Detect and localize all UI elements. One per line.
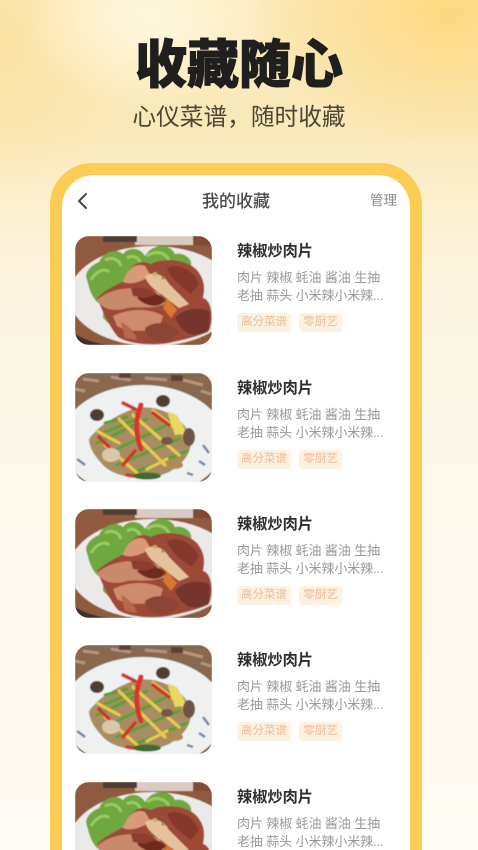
recipe row 4 xyxy=(75,645,384,754)
ingredients line 1: 肉片 辣椒 蚝油 酱油 生抽 xyxy=(237,816,380,830)
photo: meat with lettuce xyxy=(75,509,212,618)
tag: high score: 高分菜谱 xyxy=(241,725,287,737)
recipe row 1 xyxy=(75,236,384,345)
tag: beginner: 零厨艺 xyxy=(303,725,338,737)
ingredients line 1: 肉片 辣椒 蚝油 酱油 生抽 xyxy=(237,270,380,284)
ingredients line 2: 老抽 蒜头 小米辣小米辣... xyxy=(237,696,384,712)
tag: high score xyxy=(237,586,291,605)
recipe name: 辣椒炒肉片 xyxy=(237,516,313,532)
photo: stir-fried strips xyxy=(75,373,212,482)
photo: stir-fried strips xyxy=(75,645,212,754)
recipe name: 辣椒炒肉片 xyxy=(237,652,313,668)
recipe name: 辣椒炒肉片 xyxy=(237,788,313,806)
icon: back arrow xyxy=(78,193,87,209)
recipe row 5 (cut off) xyxy=(75,782,384,850)
recipe name: 辣椒炒肉片 xyxy=(237,380,313,396)
tag: high score xyxy=(237,450,291,469)
tag: high score: 高分菜谱 xyxy=(241,316,287,328)
title: 收藏随心 xyxy=(135,37,343,95)
ingredients line 1: 肉片 辣椒 蚝油 酱油 生抽 xyxy=(237,542,380,558)
tag: beginner xyxy=(299,722,342,741)
ingredients line 1: 肉片 辣椒 蚝油 酱油 生抽 xyxy=(237,406,380,422)
recipe row 2 xyxy=(75,373,384,482)
photo: meat with lettuce xyxy=(75,236,212,345)
tag: high score xyxy=(237,722,291,741)
tag: beginner: 零厨艺 xyxy=(303,453,338,465)
ingredients line 2: 老抽 蒜头 小米辣小米辣... xyxy=(237,834,384,848)
recipe name: 辣椒炒肉片 xyxy=(237,242,313,260)
tag: high score xyxy=(237,313,291,332)
tag: beginner: 零厨艺 xyxy=(303,589,338,601)
phone screen: white panel xyxy=(62,175,410,850)
nav heading: 我的收藏 xyxy=(202,192,270,211)
subtitle: 心仪菜谱，随时收藏 xyxy=(132,105,346,131)
tag: beginner: 零厨艺 xyxy=(303,316,338,328)
tag: beginner xyxy=(299,586,342,605)
tag: beginner xyxy=(299,313,342,332)
ingredients line 2: 老抽 蒜头 小米辣小米辣... xyxy=(237,288,384,302)
photo: meat with lettuce xyxy=(75,782,212,850)
ingredients line 1: 肉片 辣椒 蚝油 酱油 生抽 xyxy=(237,678,380,694)
recipe row 3 xyxy=(75,509,384,618)
tag: beginner xyxy=(299,450,342,469)
manage button: 管理 xyxy=(370,193,397,208)
tag: high score: 高分菜谱 xyxy=(241,589,287,601)
phone frame: yellow border xyxy=(50,163,422,850)
tag: high score: 高分菜谱 xyxy=(241,453,287,465)
ingredients line 2: 老抽 蒜头 小米辣小米辣... xyxy=(237,424,384,440)
ingredients line 2: 老抽 蒜头 小米辣小米辣... xyxy=(237,560,384,576)
